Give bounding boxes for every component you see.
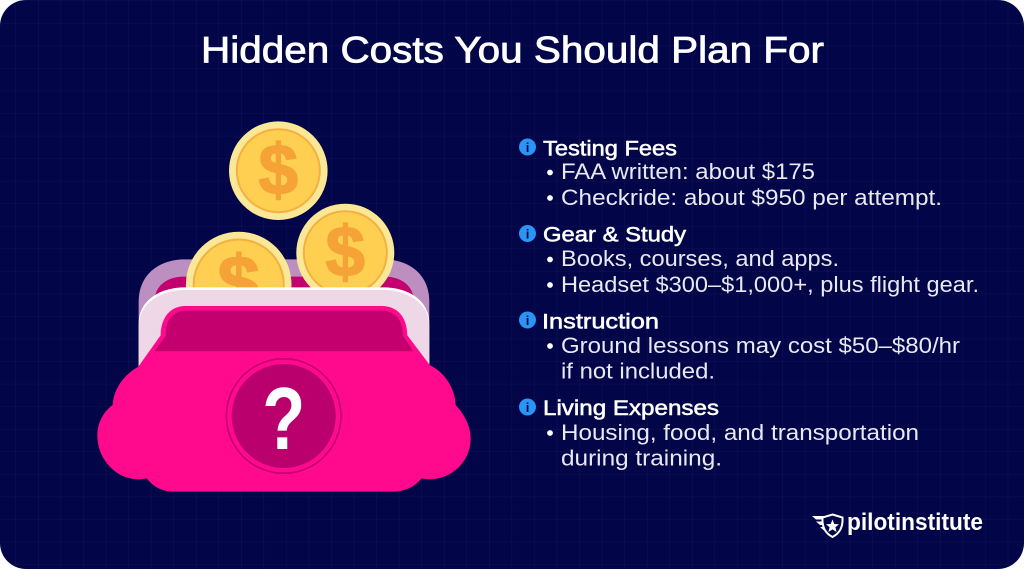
bullet list: Headset $300–$1,000+, plus flight gear. — [561, 272, 979, 297]
coin: right: $ — [326, 213, 365, 292]
title: Hidden Costs You Should Plan For — [201, 30, 824, 70]
heading: Instruction — [542, 310, 659, 333]
bullet list: Books, courses, and apps. — [561, 246, 839, 271]
illustration: coin purse with coins — [97, 121, 471, 492]
icon: info — [519, 225, 536, 242]
purse back frame — [139, 259, 429, 323]
icon: info: i — [526, 400, 529, 415]
bullet list: during training. — [561, 445, 722, 470]
bullet list: if not included. — [561, 358, 715, 384]
icon: info: i — [526, 313, 529, 328]
icon: info: i — [526, 226, 529, 242]
wordmark: pilotinstitute — [847, 509, 983, 536]
bullet list: FAA written: about $175 — [561, 159, 815, 184]
bullet list — [547, 159, 942, 210]
icon: info — [519, 138, 536, 156]
coin: left — [186, 232, 292, 288]
icon: info: i — [526, 140, 529, 155]
heading: Living Expenses — [543, 397, 719, 420]
icon: info — [519, 398, 536, 416]
logo: pilot institute — [812, 509, 983, 537]
icon: info — [519, 312, 536, 328]
bullet list: Housing, food, and transportation — [561, 420, 919, 445]
section: instruction — [519, 310, 960, 384]
purse body — [97, 306, 471, 492]
coin: top — [229, 121, 328, 220]
section: living expenses — [519, 397, 919, 470]
section: testing fees — [519, 138, 942, 210]
bullet list: Checkride: about $950 per attempt. — [561, 185, 942, 210]
heading: Gear & Study — [543, 224, 687, 246]
question mark badge: ? — [262, 369, 305, 468]
bullet list — [547, 420, 919, 470]
heading: Testing Fees — [543, 138, 677, 160]
section: gear and study — [519, 224, 979, 297]
bullet list — [547, 333, 960, 384]
coin: top: $ — [259, 131, 298, 210]
purse front frame — [139, 287, 429, 370]
bullet list — [547, 246, 979, 297]
icon: winged shield — [812, 514, 843, 537]
coin: left: $ — [218, 241, 260, 326]
coin: right — [296, 204, 394, 288]
bullet list: Ground lessons may cost $50–$80/hr — [561, 333, 960, 358]
question mark badge — [226, 359, 341, 473]
